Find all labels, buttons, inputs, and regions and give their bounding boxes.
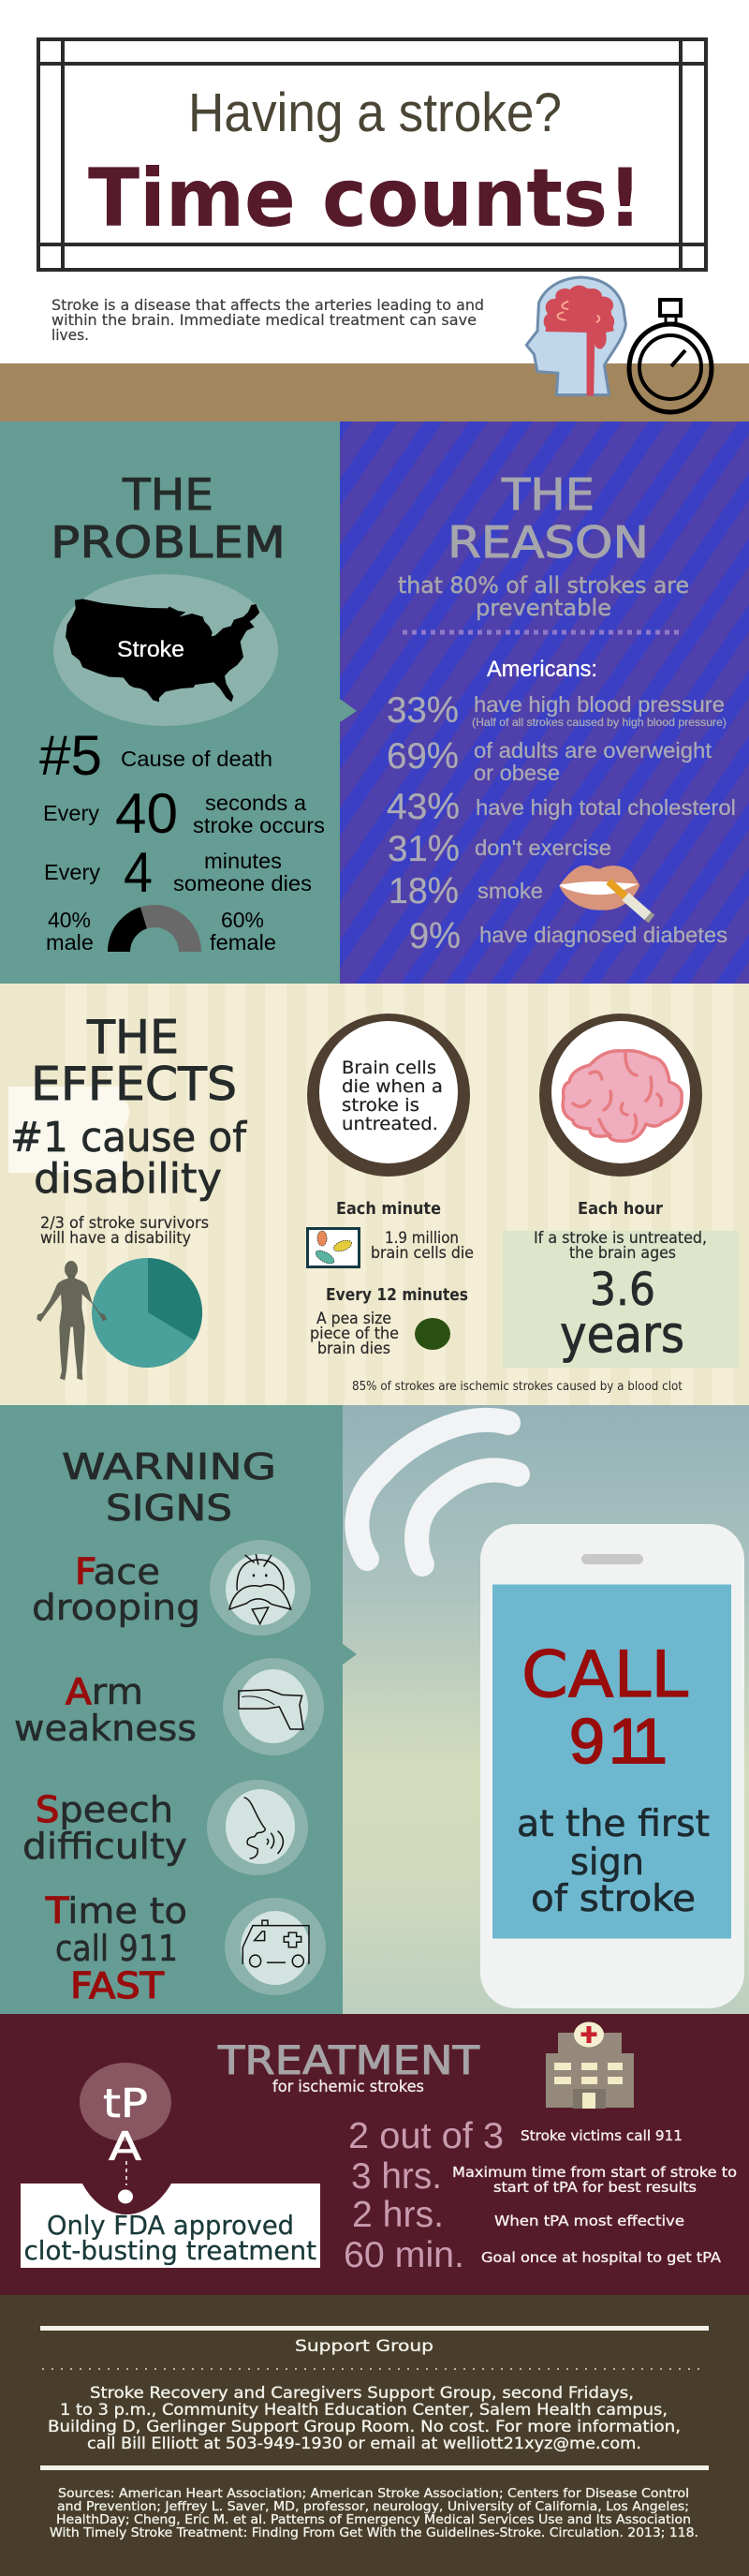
- tan band: [0, 363, 749, 422]
- heading: support group: Support Group: [295, 2337, 433, 2356]
- subheading: 80 percent preventable: that 80% of all strokes are: [398, 572, 689, 599]
- stat list: risk factors: 33%: [387, 690, 459, 731]
- heading: treatment: TREATMENT: [217, 2037, 479, 2083]
- icon: brain cells: [307, 1229, 360, 1266]
- stat: every 4 minutes: Every: [44, 860, 101, 884]
- panel: call 911: [343, 1405, 749, 2014]
- text: sources: [50, 2486, 698, 2540]
- subheading: 80 percent preventable: [398, 572, 689, 621]
- label: each minute: Each minute: [336, 1199, 441, 1219]
- icon: hospital: [546, 2021, 634, 2109]
- callout: brain ages 3.6 years: years: [560, 1305, 684, 1364]
- subheading: 80 percent preventable: preventable: [476, 595, 611, 621]
- intro text: [51, 296, 484, 344]
- heading: the reason: THE: [501, 469, 595, 520]
- stats: treatment timing: 2 out of 3: [348, 2116, 504, 2156]
- stats: treatment timing: Goal once at hospital to get tPA: [481, 2249, 722, 2266]
- heading: the reason: REASON: [448, 517, 649, 568]
- label: every 12 minutes: Every 12 minutes: [326, 1285, 468, 1305]
- panel: warning signs: [0, 1405, 343, 2014]
- subheading: number 1 cause of disability: #1 cause of: [10, 1114, 247, 1162]
- panel: support group and sources: [0, 2295, 749, 2576]
- text: sources: With Timely Stroke Treatment: Finding From Get With the Guidelines-Stroke. Circulation. 2013; 118.: [50, 2525, 698, 2540]
- callout: brain ages 3.6 years: [503, 1229, 739, 1368]
- stat list: risk factors: 69%: [387, 736, 459, 777]
- stats: treatment timing: start of tPA for best results: [493, 2179, 697, 2196]
- heading: warning signs: SIGNS: [106, 1488, 232, 1529]
- stat list: risk factors: 43%: [387, 787, 460, 827]
- text: two thirds of survivors: 2/3 of stroke survivors: [40, 1214, 209, 1233]
- stat: number 5 cause of death: [39, 724, 272, 787]
- callout: brain cells die: die when a: [342, 1076, 443, 1097]
- stat list: risk factors: 31%: [388, 829, 460, 869]
- intro text: lives.: [51, 326, 89, 344]
- stat: every 40 seconds: [43, 782, 325, 845]
- stat list: risk factors: (Half of all strokes caused by high blood pressure): [472, 716, 727, 729]
- heading: the reason: [448, 469, 649, 568]
- stat: every 4 minutes: 4: [124, 841, 153, 904]
- subheading: for ischemic strokes: for ischemic strokes: [272, 2078, 424, 2096]
- stat list: risk factors: don't exercise: [475, 836, 611, 860]
- sign: time to call 911 fast: [45, 1890, 326, 2006]
- sign: speech difficulty: [22, 1780, 308, 1875]
- stat: every 40 seconds: Every: [43, 801, 100, 825]
- stat list: risk factors: have high blood pressure: [474, 692, 725, 717]
- sign: speech difficulty: difficulty: [22, 1826, 187, 1867]
- stats: treatment timing: [344, 2116, 737, 2275]
- stats: treatment timing: When tPA most effective: [494, 2213, 684, 2229]
- heading: the problem: [51, 469, 286, 568]
- heading: the effects: [31, 1011, 237, 1111]
- text: sources: and Prevention; Jeffrey L. Saver, MD, professor, neurology, University of California, Los Angeles;: [57, 2499, 689, 2514]
- chart: disability pie: [92, 1258, 202, 1368]
- map: united states: [53, 574, 278, 726]
- text: at the first sign of stroke: sign: [570, 1842, 644, 1884]
- text: 1.9 million brain cells die: [371, 1229, 474, 1263]
- text: support group details: Building D, Gerlinger Support Group Room. No cost. For more information,: [48, 2418, 681, 2436]
- text: 1.9 million brain cells die: 1.9 million: [385, 1229, 459, 1248]
- text: pea size: A pea size: [316, 1310, 391, 1328]
- title: time counts: Time counts!: [88, 152, 642, 245]
- text: support group details: 1 to 3 p.m., Community Health Education Center, Salem Health campus,: [60, 2401, 668, 2420]
- stats: treatment timing: 2 hrs.: [352, 2195, 444, 2235]
- text: pea size: [310, 1310, 399, 1358]
- stat: number 5 cause of death: #5: [39, 724, 102, 787]
- callout: brain cells die: untreated.: [342, 1114, 438, 1134]
- text: at the first sign of stroke: [517, 1803, 710, 1920]
- stat: number 5 cause of death: Cause of death: [121, 747, 272, 771]
- stat: every 4 minutes: [44, 841, 312, 904]
- callout: brain ages 3.6 years: If a stroke is untreated,: [534, 1229, 707, 1248]
- stat list: risk factors: or obese: [474, 761, 560, 785]
- title: having a stroke: Having a stroke?: [188, 82, 562, 143]
- sign: arm weakness: weakness: [14, 1708, 197, 1749]
- stats: treatment timing: 60 min.: [344, 2235, 464, 2275]
- stats: treatment timing: Maximum time from start of stroke to: [452, 2164, 737, 2181]
- text: sources: HealthDay; Cheng, Eric M. et al. Patterns of Emergency Medical Services Use and Its Association: [56, 2512, 691, 2527]
- text: call 911: [521, 1638, 688, 1777]
- panel: the effects: [0, 984, 749, 1405]
- sign: time to call 911 fast: FAST: [70, 1965, 165, 2006]
- heading: the effects: EFFECTS: [31, 1058, 237, 1111]
- intro text: Stroke is a disease that affects the arteries leading to and: [51, 296, 484, 314]
- callout: brain cells die: [307, 1014, 470, 1177]
- sign: face drooping: Face: [75, 1551, 160, 1592]
- text: support group details: [48, 2384, 681, 2453]
- intro text: within the brain. Immediate medical treatment can save: [51, 311, 477, 329]
- callout: brain ages 3.6 years: 3.6: [590, 1264, 655, 1316]
- label: each hour: Each hour: [578, 1199, 663, 1219]
- graphic: tPA pin: tP: [103, 2080, 148, 2126]
- icon: head with brain: [526, 277, 625, 396]
- icon: green pea: [415, 1318, 450, 1350]
- callout: brain cells die: Brain cells: [342, 1058, 436, 1078]
- graphic: tPA pin: A: [109, 2124, 141, 2169]
- text: call 911: CALL: [521, 1638, 688, 1712]
- icon: human silhouette: [37, 1261, 107, 1380]
- stats: treatment timing: Stroke victims call 911: [521, 2127, 683, 2144]
- sign: face drooping: [32, 1540, 311, 1636]
- callout: brain ages 3.6 years: the brain ages: [569, 1244, 676, 1263]
- text: two thirds of survivors: will have a disability: [40, 1229, 191, 1248]
- chart: male female half donut: 40%: [48, 908, 91, 932]
- text: pea size: piece of the: [310, 1325, 399, 1343]
- callout: brain cells die: stroke is: [342, 1095, 419, 1116]
- icon: phone: [480, 1524, 744, 2008]
- sign: face drooping: drooping: [32, 1587, 200, 1628]
- icon: pink brain: [539, 1014, 702, 1177]
- stat: every 40 seconds: 40: [115, 782, 178, 845]
- sign: speech difficulty: Speech: [36, 1789, 173, 1830]
- heading: the problem: THE: [122, 469, 213, 520]
- stat: every 4 minutes: minutes: [204, 849, 282, 873]
- panel: the reason: [340, 422, 749, 984]
- stat list: risk factors: have high total cholesterol: [476, 795, 736, 820]
- panel: treatment: [0, 2014, 749, 2295]
- heading: the problem: PROBLEM: [51, 517, 286, 568]
- text: at the first sign of stroke: at the first: [517, 1803, 710, 1845]
- chart: male female half donut: male: [46, 930, 94, 955]
- chart: male female half donut: female: [210, 930, 276, 955]
- icon: lips with cigarette: [559, 866, 652, 919]
- text: support group details: call Bill Elliott at 503-949-1930 or email at welliott21xyz@me.com.: [87, 2435, 641, 2453]
- text: sources: Sources: American Heart Association; American Stroke Association; Centers for Disease Control: [58, 2486, 689, 2501]
- text: pea size: brain dies: [317, 1340, 390, 1358]
- heading: warning signs: [62, 1446, 276, 1529]
- panel: the problem: [0, 422, 341, 984]
- stat list: risk factors: smoke: [477, 879, 543, 903]
- chart: male female half donut: 60%: [221, 908, 264, 932]
- text: two thirds of survivors: [40, 1214, 209, 1248]
- stat: every 40 seconds: stroke occurs: [193, 813, 325, 837]
- decorative white arrow tag: [8, 1087, 130, 1173]
- stats: treatment timing: 3 hrs.: [351, 2156, 442, 2197]
- icon: signal waves: [357, 1420, 518, 1564]
- text: 1.9 million brain cells die: brain cells die: [371, 1244, 474, 1263]
- callout: only FDA approved: Only FDA approved: [47, 2210, 294, 2241]
- subheading: number 1 cause of disability: [10, 1114, 247, 1203]
- footnote: ischemic strokes: 85% of strokes are ischemic strokes caused by a blood clot: [352, 1380, 683, 1394]
- stat: every 4 minutes: someone dies: [173, 871, 312, 896]
- sign: arm weakness: Arm: [66, 1671, 143, 1712]
- callout: only FDA approved: clot-busting treatment: [24, 2235, 316, 2266]
- sign: time to call 911 fast: Time to: [45, 1890, 187, 1932]
- arrow: warning signs to call: [343, 1644, 357, 1665]
- icon: stopwatch: [629, 300, 712, 412]
- subheading: number 1 cause of disability: disability: [34, 1155, 222, 1203]
- sign: arm weakness: [14, 1658, 324, 1755]
- text: at the first sign of stroke: of stroke: [531, 1878, 696, 1920]
- heading: the effects: THE: [86, 1011, 179, 1064]
- text: support group details: Stroke Recovery and Caregivers Support Group, second Fridays,: [90, 2384, 634, 2403]
- stat list: risk factors: [387, 690, 736, 956]
- stat list: risk factors: have diagnosed diabetes: [479, 923, 727, 947]
- panel: header: [0, 0, 749, 422]
- title frame: [38, 39, 706, 270]
- arrow: problem to reason: [340, 699, 357, 722]
- sign: time to call 911 fast: call 911: [55, 1928, 178, 1969]
- stat list: risk factors: of adults are overweight: [474, 738, 712, 762]
- stat list: risk factors: 9%: [409, 916, 461, 956]
- heading: warning signs: WARNING: [62, 1446, 276, 1488]
- text: call 911: 911: [569, 1706, 668, 1777]
- callout: only FDA approved: [21, 2184, 320, 2268]
- graphic: tPA pin: [21, 2063, 320, 2268]
- stat: every 40 seconds: seconds a: [205, 791, 306, 815]
- chart: male female half donut: [46, 905, 276, 955]
- stat list: risk factors: 18%: [389, 871, 459, 911]
- label: americans: Americans:: [487, 657, 597, 682]
- map: united states: Stroke: [117, 637, 184, 662]
